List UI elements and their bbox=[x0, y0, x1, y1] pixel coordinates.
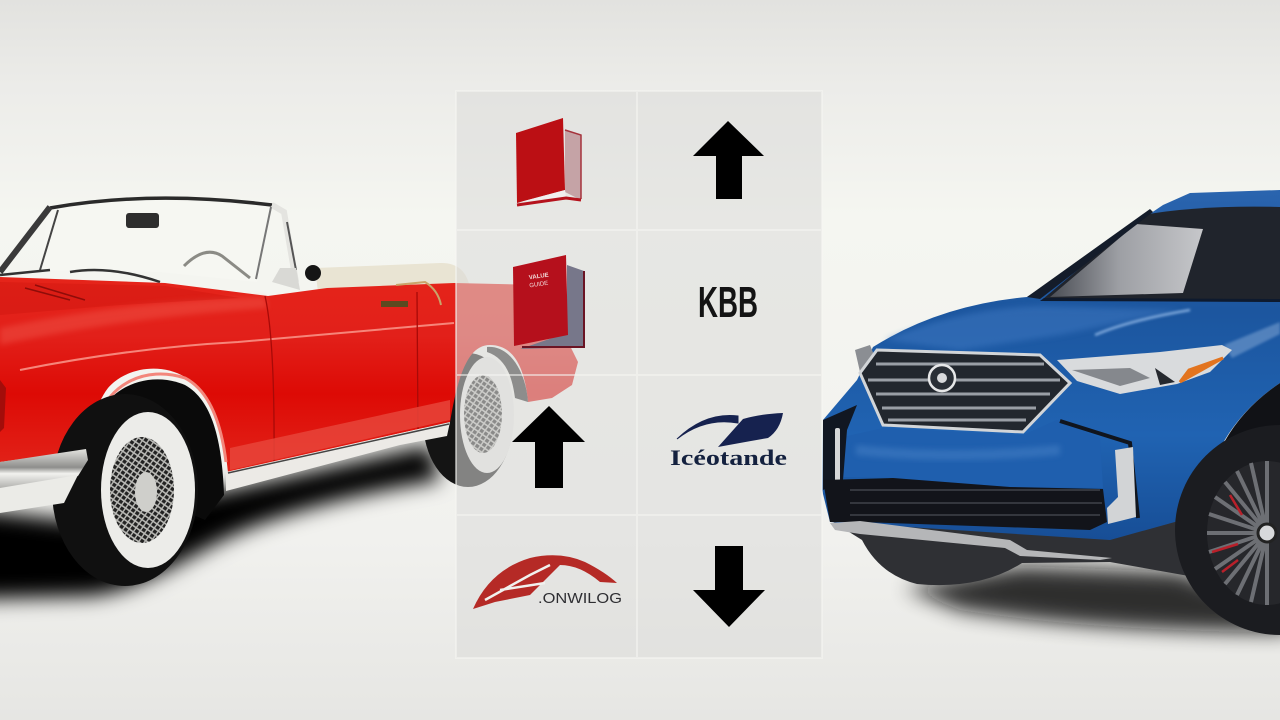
wheel arch bbox=[1203, 383, 1280, 540]
red classic convertible bbox=[0, 198, 578, 600]
book cover text: VALUE bbox=[529, 273, 549, 281]
label: KBB: KBB bbox=[698, 278, 758, 327]
wheel spokes bbox=[1207, 461, 1267, 605]
left fog strip bbox=[835, 428, 840, 484]
icon: red book bbox=[516, 118, 581, 205]
icon: arrow up, top right bbox=[693, 121, 764, 199]
ground shadow under SUV bbox=[905, 566, 1280, 632]
grille emblem bbox=[929, 365, 955, 391]
A-pillar bbox=[1027, 209, 1153, 299]
tail light bbox=[0, 380, 6, 432]
logo wordmark: .ONWILOG bbox=[538, 590, 622, 607]
windshield frame bbox=[0, 198, 296, 282]
comparison table panel bbox=[456, 91, 822, 658]
hood highlight bbox=[0, 297, 268, 345]
dash shadow bbox=[1040, 298, 1280, 302]
door sill highlight bbox=[230, 400, 450, 470]
logo: blue wing bbox=[670, 413, 787, 470]
icon: red guide book bbox=[513, 255, 584, 349]
body crease line bbox=[20, 323, 454, 370]
hood highlights bbox=[885, 306, 1180, 350]
front wheel bbox=[52, 394, 198, 586]
hood crease bbox=[1095, 310, 1190, 335]
wing mirror bbox=[272, 265, 321, 290]
SUV wheel bbox=[1175, 425, 1280, 635]
right vent stroke bbox=[1060, 421, 1138, 518]
rear arch shadow bbox=[487, 347, 528, 402]
lower black grille bbox=[823, 478, 1107, 530]
wheel hub bbox=[1258, 524, 1276, 542]
roof and body shell bbox=[822, 190, 1280, 540]
logo wordmark: Icéotande bbox=[670, 445, 787, 470]
icon: arrow up, left column bbox=[512, 406, 585, 488]
ground shadow under red car bbox=[0, 445, 440, 600]
front grille bbox=[860, 350, 1070, 432]
cowl shading bbox=[0, 282, 240, 315]
wheel arch well bbox=[90, 379, 224, 520]
windshield reflection bbox=[1050, 224, 1203, 297]
left black intake bbox=[823, 405, 857, 490]
icon: red guide book: GUIDE bbox=[529, 281, 549, 289]
rear wheel bbox=[423, 353, 514, 487]
panel grid bbox=[456, 91, 822, 658]
beige tonneau bbox=[315, 263, 470, 292]
headlight bbox=[1057, 345, 1232, 394]
windshield bbox=[1043, 207, 1280, 299]
door trim bbox=[396, 282, 441, 305]
hood vents bbox=[25, 285, 85, 300]
right fog strip bbox=[1107, 447, 1136, 524]
door handle bbox=[381, 301, 408, 307]
left grille side bbox=[855, 345, 874, 372]
steering wheel bbox=[184, 252, 250, 278]
windshield glass bbox=[40, 198, 272, 282]
silver skid plate bbox=[830, 521, 1112, 560]
rear-view mirror bbox=[126, 213, 159, 228]
lower dark underbody bbox=[830, 510, 1210, 585]
bumper highlight bbox=[856, 445, 1060, 460]
red brake accents bbox=[1212, 495, 1242, 572]
fender highlight bbox=[1224, 322, 1280, 358]
wheel arch lip bbox=[98, 374, 226, 462]
front bumper bbox=[0, 449, 88, 513]
translucent panel fill bbox=[456, 91, 822, 658]
blue modern SUV bbox=[822, 190, 1280, 635]
icon: arrow down bbox=[693, 546, 765, 627]
wipers bbox=[0, 270, 160, 282]
chrome sill bbox=[226, 422, 450, 491]
logo: red arch bbox=[473, 555, 622, 609]
red body bbox=[0, 277, 578, 472]
lower bumper panel bbox=[843, 420, 1103, 488]
door seams bbox=[265, 292, 418, 463]
